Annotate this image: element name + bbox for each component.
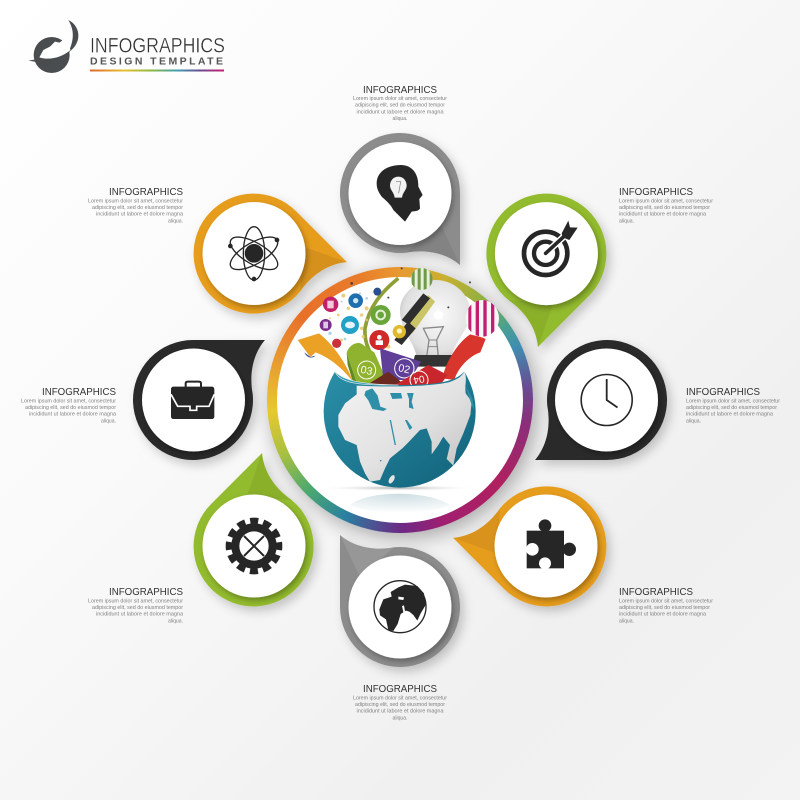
card brown [367,372,405,385]
text: lower right: INFOGRAPHICS [619,586,693,598]
white disc [142,348,245,452]
central illustration: globe with ideas [298,267,499,513]
olive band [365,278,398,357]
text: top [353,84,447,122]
text: top: Lorem ipsum dolor sit amet, consectetur [353,96,447,102]
globe reflection [350,494,450,513]
globe body [324,372,476,488]
text: lower left: INFOGRAPHICS [109,586,183,598]
text: right: INFOGRAPHICS [686,386,760,398]
balloon pink [466,298,499,338]
text: bottom [353,683,447,721]
pin 7: left, black [21,340,265,460]
text: top: incididunt ut labore et dolore magna [356,109,444,115]
text: upper left: adipiscing elit, sed do eiusmod tempor [92,205,183,211]
text: lower left [88,586,183,624]
text: lower left: Lorem ipsum dolor sit amet, consectetur [88,598,183,604]
text: lower right: Lorem ipsum dolor sit amet, consectetur [619,598,713,604]
card 03: 03 [359,364,374,378]
card 02: 02 [397,362,411,376]
text: left: INFOGRAPHICS [42,386,116,398]
icon: briefcase [171,382,214,419]
logo mark [28,20,78,73]
text: upper right: aliqua. [619,218,634,224]
text: upper right: INFOGRAPHICS [619,186,693,198]
text: lower left: aliqua. [168,618,183,624]
white disc [202,494,306,598]
card 04 [395,365,448,390]
text: right: adipiscing elit, sed do eiusmod tempor [686,405,777,411]
text: upper right: incididunt ut labore et dolore magna [619,212,706,218]
seas and gulfs [364,385,474,445]
text: lower left: incididunt ut labore et dolore magna [96,612,183,618]
text: right: Lorem ipsum dolor sit amet, consectetur [686,398,780,404]
continents [338,372,472,482]
text: left: adipiscing elit, sed do eiusmod tempor [25,405,116,411]
logo subtitle: DESIGN TEMPLATE [90,56,223,68]
text: upper right: adipiscing elit, sed do eiusmod tempor [619,205,710,211]
text: bottom: aliqua. [392,715,408,721]
text: left: Lorem ipsum dolor sit amet, consectetur [21,398,116,404]
pin 6: lower left, green [88,453,347,631]
text: right: aliqua. [686,418,701,424]
ideas bursting out of the globe [298,267,499,390]
text: right [686,386,780,424]
text: left: incididunt ut labore et dolore magna [29,412,116,418]
globe inner rim [335,372,398,385]
text: upper left [88,186,183,224]
pin 3: right, black [535,340,780,460]
card 02 [380,348,421,380]
white disc [348,142,452,245]
text: top: aliqua. [392,116,408,122]
white disc [202,202,306,305]
pin 5: bottom, grey [340,535,460,721]
text: upper left: INFOGRAPHICS [109,186,183,198]
text: upper right [619,186,713,224]
icon: atom [226,227,282,281]
text: right: incididunt ut labore et dolore magna [686,412,773,418]
pin 8: upper left, orange [88,169,347,347]
balloon green [410,268,433,290]
text: lower right: adipiscing elit, sed do eiusmod tempor [619,605,710,611]
text: left: aliqua. [101,418,116,424]
text: left [21,386,116,424]
pin 4: lower right, orange [453,453,713,631]
pin 1: top, grey [340,84,460,265]
icon: head with light bulb [377,165,423,222]
text: bottom: incididunt ut labore et dolore magna [356,709,444,715]
small round icons [320,267,471,350]
text: lower right [619,586,713,624]
icon: puzzle piece [526,519,576,569]
ground shadow [318,485,478,491]
text: top: adipiscing elit, sed do eiusmod tempor [355,103,445,109]
white disc [495,202,598,305]
white disc [348,556,452,658]
text: lower left: adipiscing elit, sed do eiusmod tempor [92,605,183,611]
white disc [555,348,658,452]
text: upper left: Lorem ipsum dolor sit amet, consectetur [88,198,183,204]
icon: globe [374,581,426,633]
text: upper right: Lorem ipsum dolor sit amet, consectetur [619,198,713,204]
text: top: INFOGRAPHICS [363,84,437,96]
light bulb [394,280,470,367]
text: bottom: adipiscing elit, sed do eiusmod tempor [355,702,445,708]
card 03 [347,343,385,385]
text: upper left: incididunt ut labore et dolore magna [96,212,183,218]
central disc with rainbow ring [267,267,533,533]
icon: target with arrow [524,221,578,275]
text: upper left: aliqua. [168,218,183,224]
text: lower right: aliqua. [619,618,634,624]
white disc [494,494,598,598]
pin 2: upper right, green [453,169,713,347]
orange ribbon arrow [298,333,353,382]
rainbow bar [90,70,224,72]
text: lower right: incididunt ut labore et dolore magna [619,612,706,618]
text: bottom: INFOGRAPHICS [363,683,437,695]
icon: clock [581,374,632,426]
icon: gear [229,521,279,571]
card 04: 04 [412,372,425,385]
logo [28,20,225,73]
red ribbon arrow [442,334,486,380]
text: bottom: Lorem ipsum dolor sit amet, consectetur [353,696,447,702]
logo title: INFOGRAPHICS [90,34,225,58]
